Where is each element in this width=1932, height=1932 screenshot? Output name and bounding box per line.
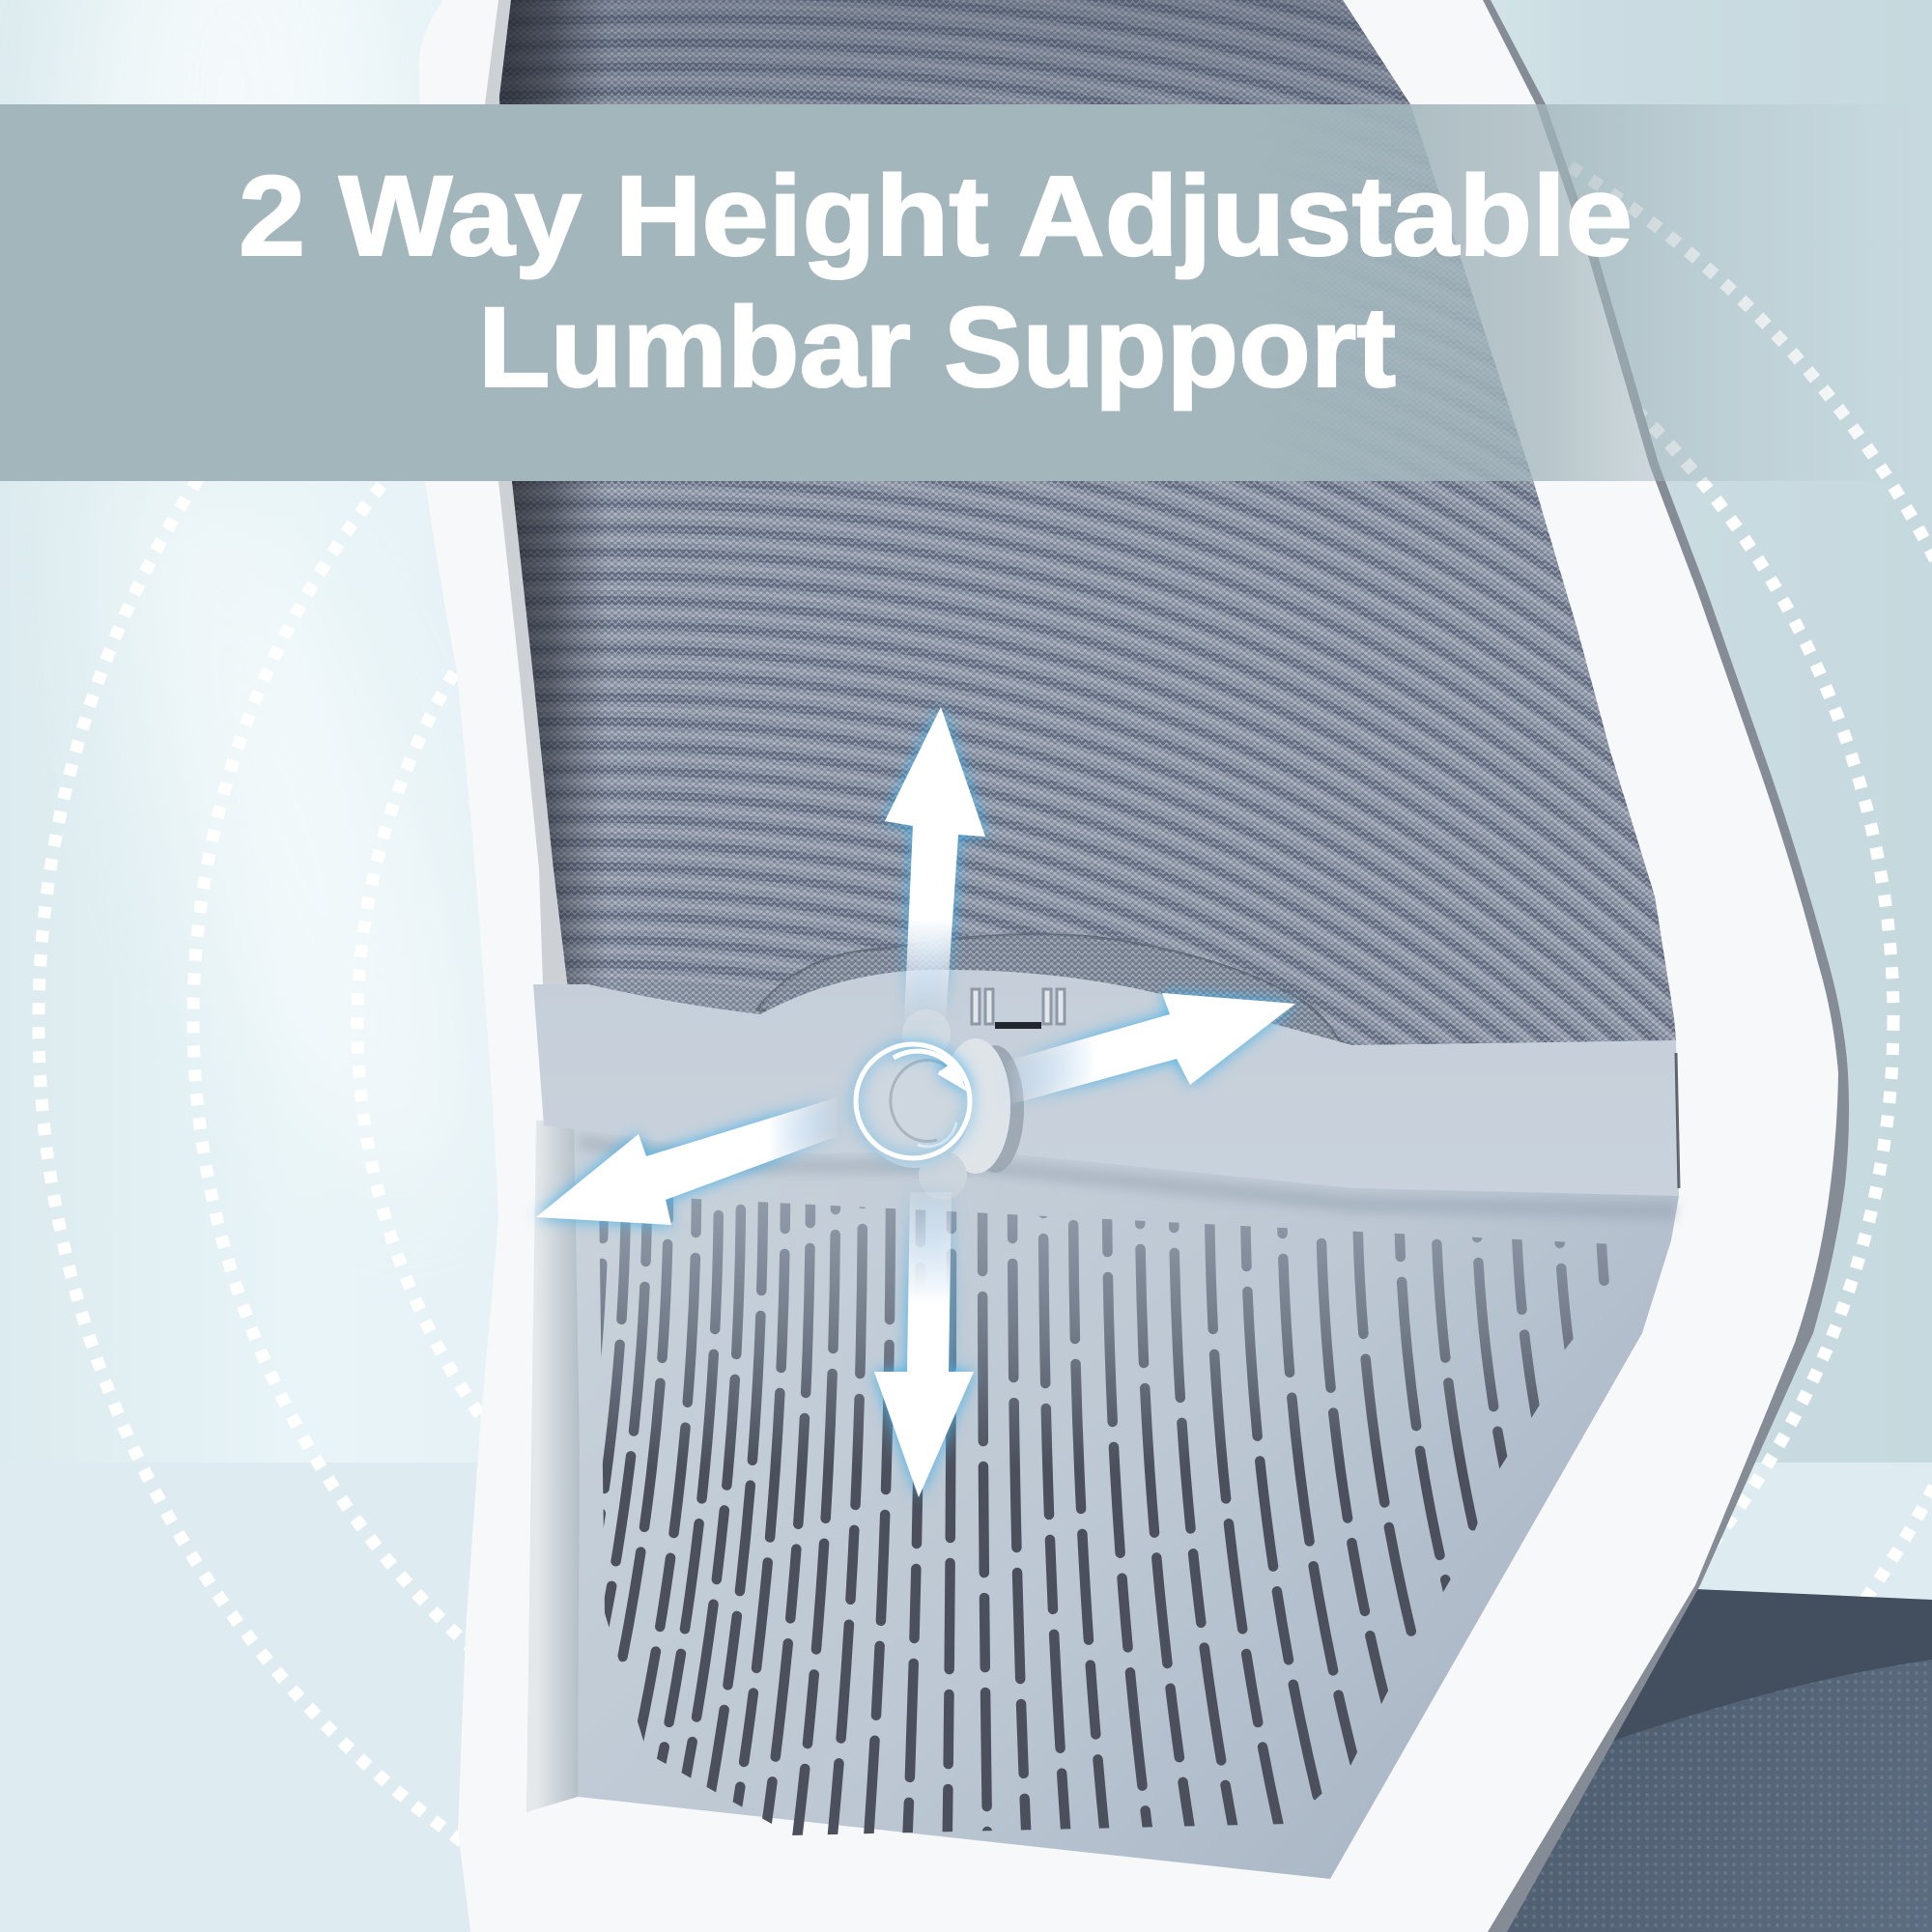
seat cushion [1449, 1584, 1932, 1932]
title: 2 Way Height Adjustable [239, 153, 1633, 280]
shadow under bar [580, 1135, 1676, 1219]
lumbar cushion [757, 935, 1343, 1053]
chair white frame [419, 0, 1838, 1932]
arrow: right [1005, 993, 1295, 1106]
title banner [0, 104, 1932, 481]
adjustment knob [859, 1009, 1024, 1200]
frame inner grey band [485, 0, 570, 985]
title: Lumbar Support [478, 284, 1396, 412]
panel side band [526, 1121, 580, 1812]
arrow: down [874, 1192, 974, 1497]
chair mesh edge strip [1449, 0, 1849, 1932]
rotation ring arrow [856, 1044, 970, 1158]
hub clip detail [972, 989, 1065, 1029]
panel ventilation slots [599, 1198, 1609, 1835]
back mesh [499, 0, 1676, 1045]
arrow: up [885, 707, 985, 1020]
title [239, 153, 1633, 412]
lumbar support bar [533, 970, 1679, 1196]
backrest lower panel [570, 1121, 1679, 1879]
arrow: left [536, 1097, 838, 1225]
